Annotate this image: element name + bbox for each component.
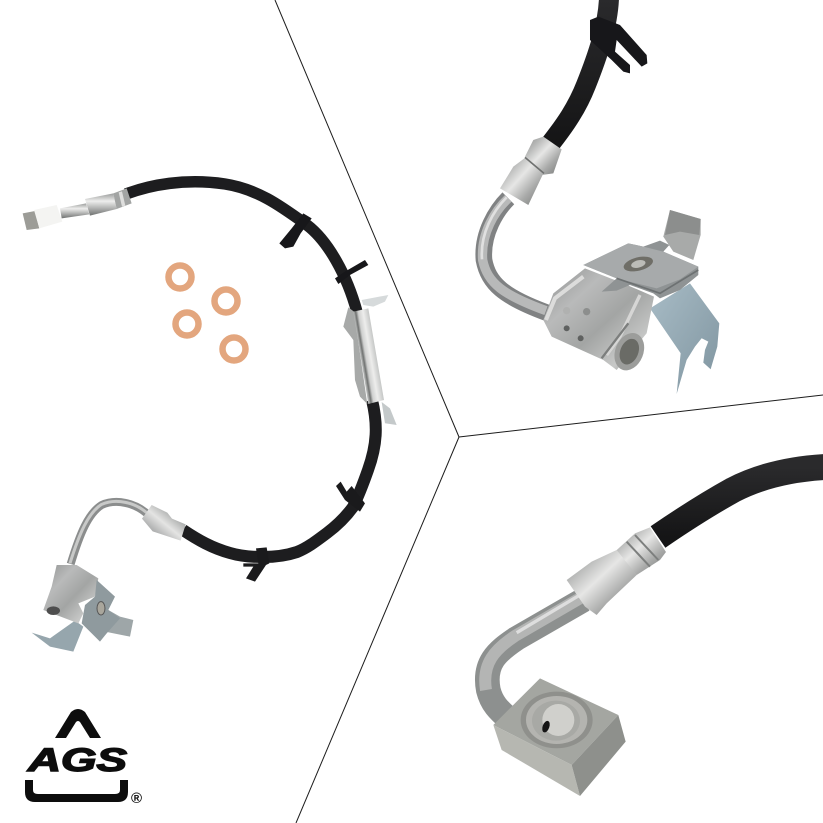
logo: upper chevron	[55, 709, 101, 738]
top plate	[583, 241, 698, 298]
bracket sleeve on the hose	[343, 295, 397, 425]
block faces	[493, 678, 618, 765]
clamp body	[543, 268, 654, 370]
lower fitting: tube and clamp	[32, 501, 186, 652]
clips on the hose	[279, 213, 368, 284]
end fitting: left tip and ferrule	[23, 188, 132, 230]
logo: wordmark: AGS	[27, 742, 128, 778]
lower clips on the hose	[243, 482, 365, 582]
bore rings	[521, 692, 593, 748]
panel: clamp fitting close-up	[482, 0, 719, 394]
steel tube	[487, 600, 583, 720]
lower blue bracket	[650, 283, 719, 394]
panel: full hose assembly	[23, 182, 397, 652]
banjo fitting	[485, 527, 666, 796]
clip on close-up hose	[590, 17, 647, 73]
copper washers	[168, 266, 246, 360]
bent steel tube	[484, 198, 547, 313]
clamp fitting	[482, 137, 719, 394]
logo: lower bracket	[25, 780, 128, 802]
hose and clip	[551, 0, 609, 143]
threaded port	[609, 328, 650, 375]
upper tab	[663, 210, 701, 260]
panel: banjo block fitting close-up	[485, 467, 823, 796]
crimped ferrule	[615, 527, 666, 575]
black hose	[658, 467, 823, 537]
divider lines between the three panels	[275, 0, 823, 823]
crimped ferrule	[525, 137, 562, 175]
hose: upper section	[126, 182, 357, 312]
logo: registered mark: ®	[131, 790, 142, 807]
AGS logo	[25, 709, 142, 807]
hose: lower section	[183, 400, 376, 557]
